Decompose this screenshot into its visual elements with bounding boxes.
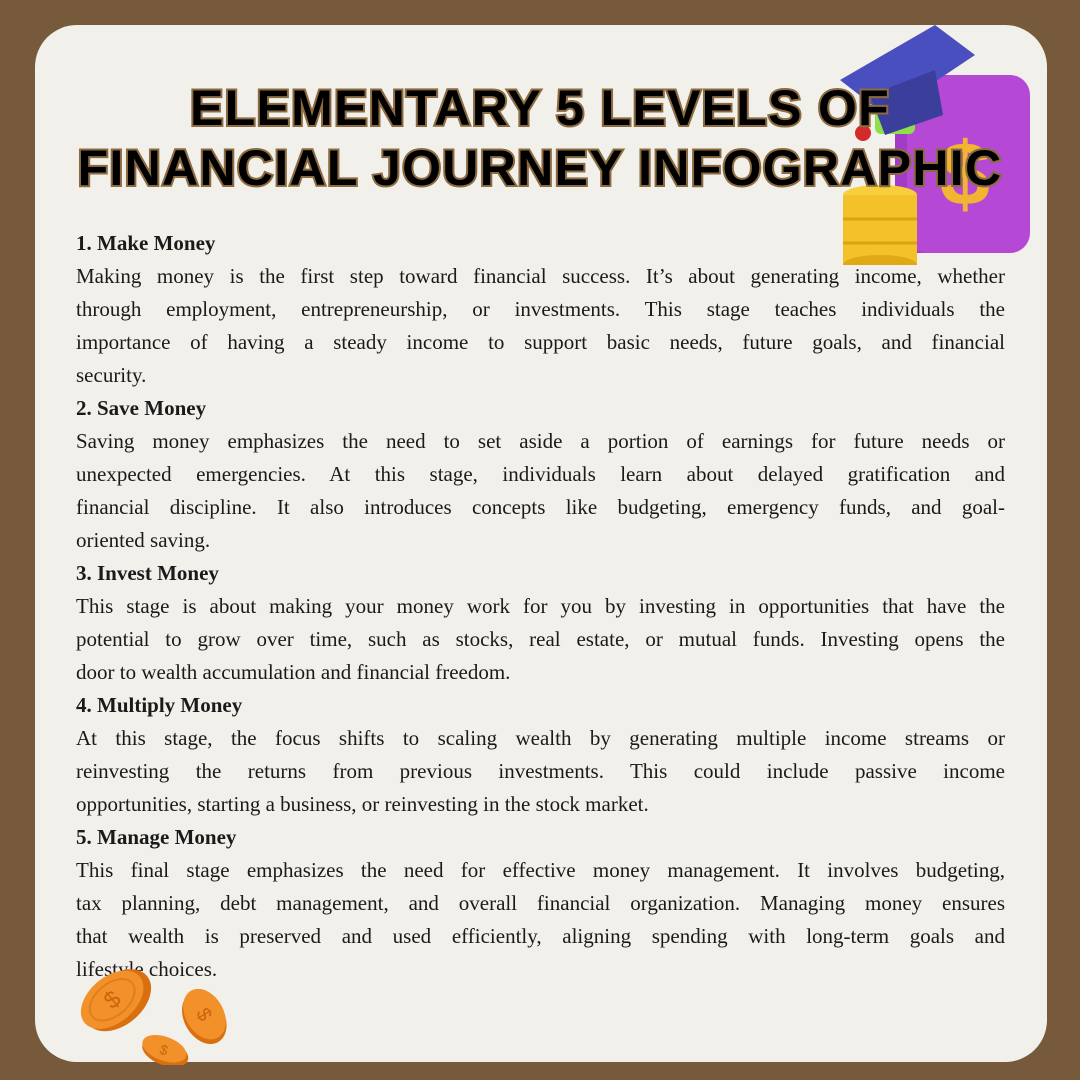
text block: five levels bbox=[76, 231, 1005, 981]
section 4: 4. Multiply Money bbox=[76, 693, 242, 717]
section 4: reinvesting the returns from previous investments. This could include passive income bbox=[76, 759, 1005, 783]
section 1: through employment, entrepreneurship, or investments. This stage teaches individuals the bbox=[76, 297, 1005, 321]
section 2: unexpected emergencies. At this stage, individuals learn about delayed gratification and bbox=[76, 462, 1005, 486]
section 4: At this stage, the focus shifts to scaling wealth by generating multiple income streams or bbox=[76, 726, 1005, 750]
icon: orange coins bbox=[80, 969, 227, 1065]
section 5: tax planning, debt management, and overall financial organization. Managing money ensures bbox=[76, 891, 1005, 915]
section 3: This stage is about making your money work for you by investing in opportunities that have the bbox=[76, 594, 1005, 618]
section 2: financial discipline. It also introduces concepts like budgeting, emergency funds, and goal- bbox=[76, 495, 1005, 519]
section 2: 2. Save Money bbox=[76, 396, 206, 420]
section 5: lifestyle choices. bbox=[76, 957, 217, 981]
section 1: 1. Make Money bbox=[76, 231, 215, 255]
section 1 bbox=[76, 231, 1005, 387]
section 3: door to wealth accumulation and financial freedom. bbox=[76, 660, 510, 684]
section 1: security. bbox=[76, 363, 146, 387]
title bbox=[78, 80, 1002, 196]
title: ELEMENTARY 5 LEVELS OF bbox=[190, 80, 890, 136]
icon: orange coins: $ bbox=[99, 986, 126, 1015]
icon: orange coins: $ bbox=[191, 1004, 216, 1025]
section 5: that wealth is preserved and used efficiently, aligning spending with long-term goals and bbox=[76, 924, 1005, 948]
section 3 bbox=[76, 561, 1005, 684]
icon: book with graduation cap and coins: $ bbox=[940, 125, 990, 225]
section 5: This final stage emphasizes the need for effective money management. It involves budgeting, bbox=[76, 858, 1005, 882]
section 1: importance of having a steady income to support basic needs, future goals, and financial bbox=[76, 330, 1005, 354]
section 2: Saving money emphasizes the need to set aside a portion of earnings for future needs or bbox=[76, 429, 1005, 453]
section 4 bbox=[76, 693, 1005, 816]
section 2 bbox=[76, 396, 1005, 552]
section 4: opportunities, starting a business, or reinvesting in the stock market. bbox=[76, 792, 649, 816]
section 5: 5. Manage Money bbox=[76, 825, 236, 849]
title: FINANCIAL JOURNEY INFOGRAPHIC bbox=[78, 140, 1002, 196]
section 5 bbox=[76, 825, 1005, 981]
section 3: 3. Invest Money bbox=[76, 561, 219, 585]
icon: orange coins: $ bbox=[158, 1041, 171, 1059]
section 1: Making money is the first step toward financial success. It’s about generating income, whether bbox=[76, 264, 1005, 288]
section 3: potential to grow over time, such as stocks, real estate, or mutual funds. Investing opens the bbox=[76, 627, 1005, 651]
section 2: oriented saving. bbox=[76, 528, 210, 552]
icon: book with graduation cap and coins bbox=[840, 25, 1030, 265]
